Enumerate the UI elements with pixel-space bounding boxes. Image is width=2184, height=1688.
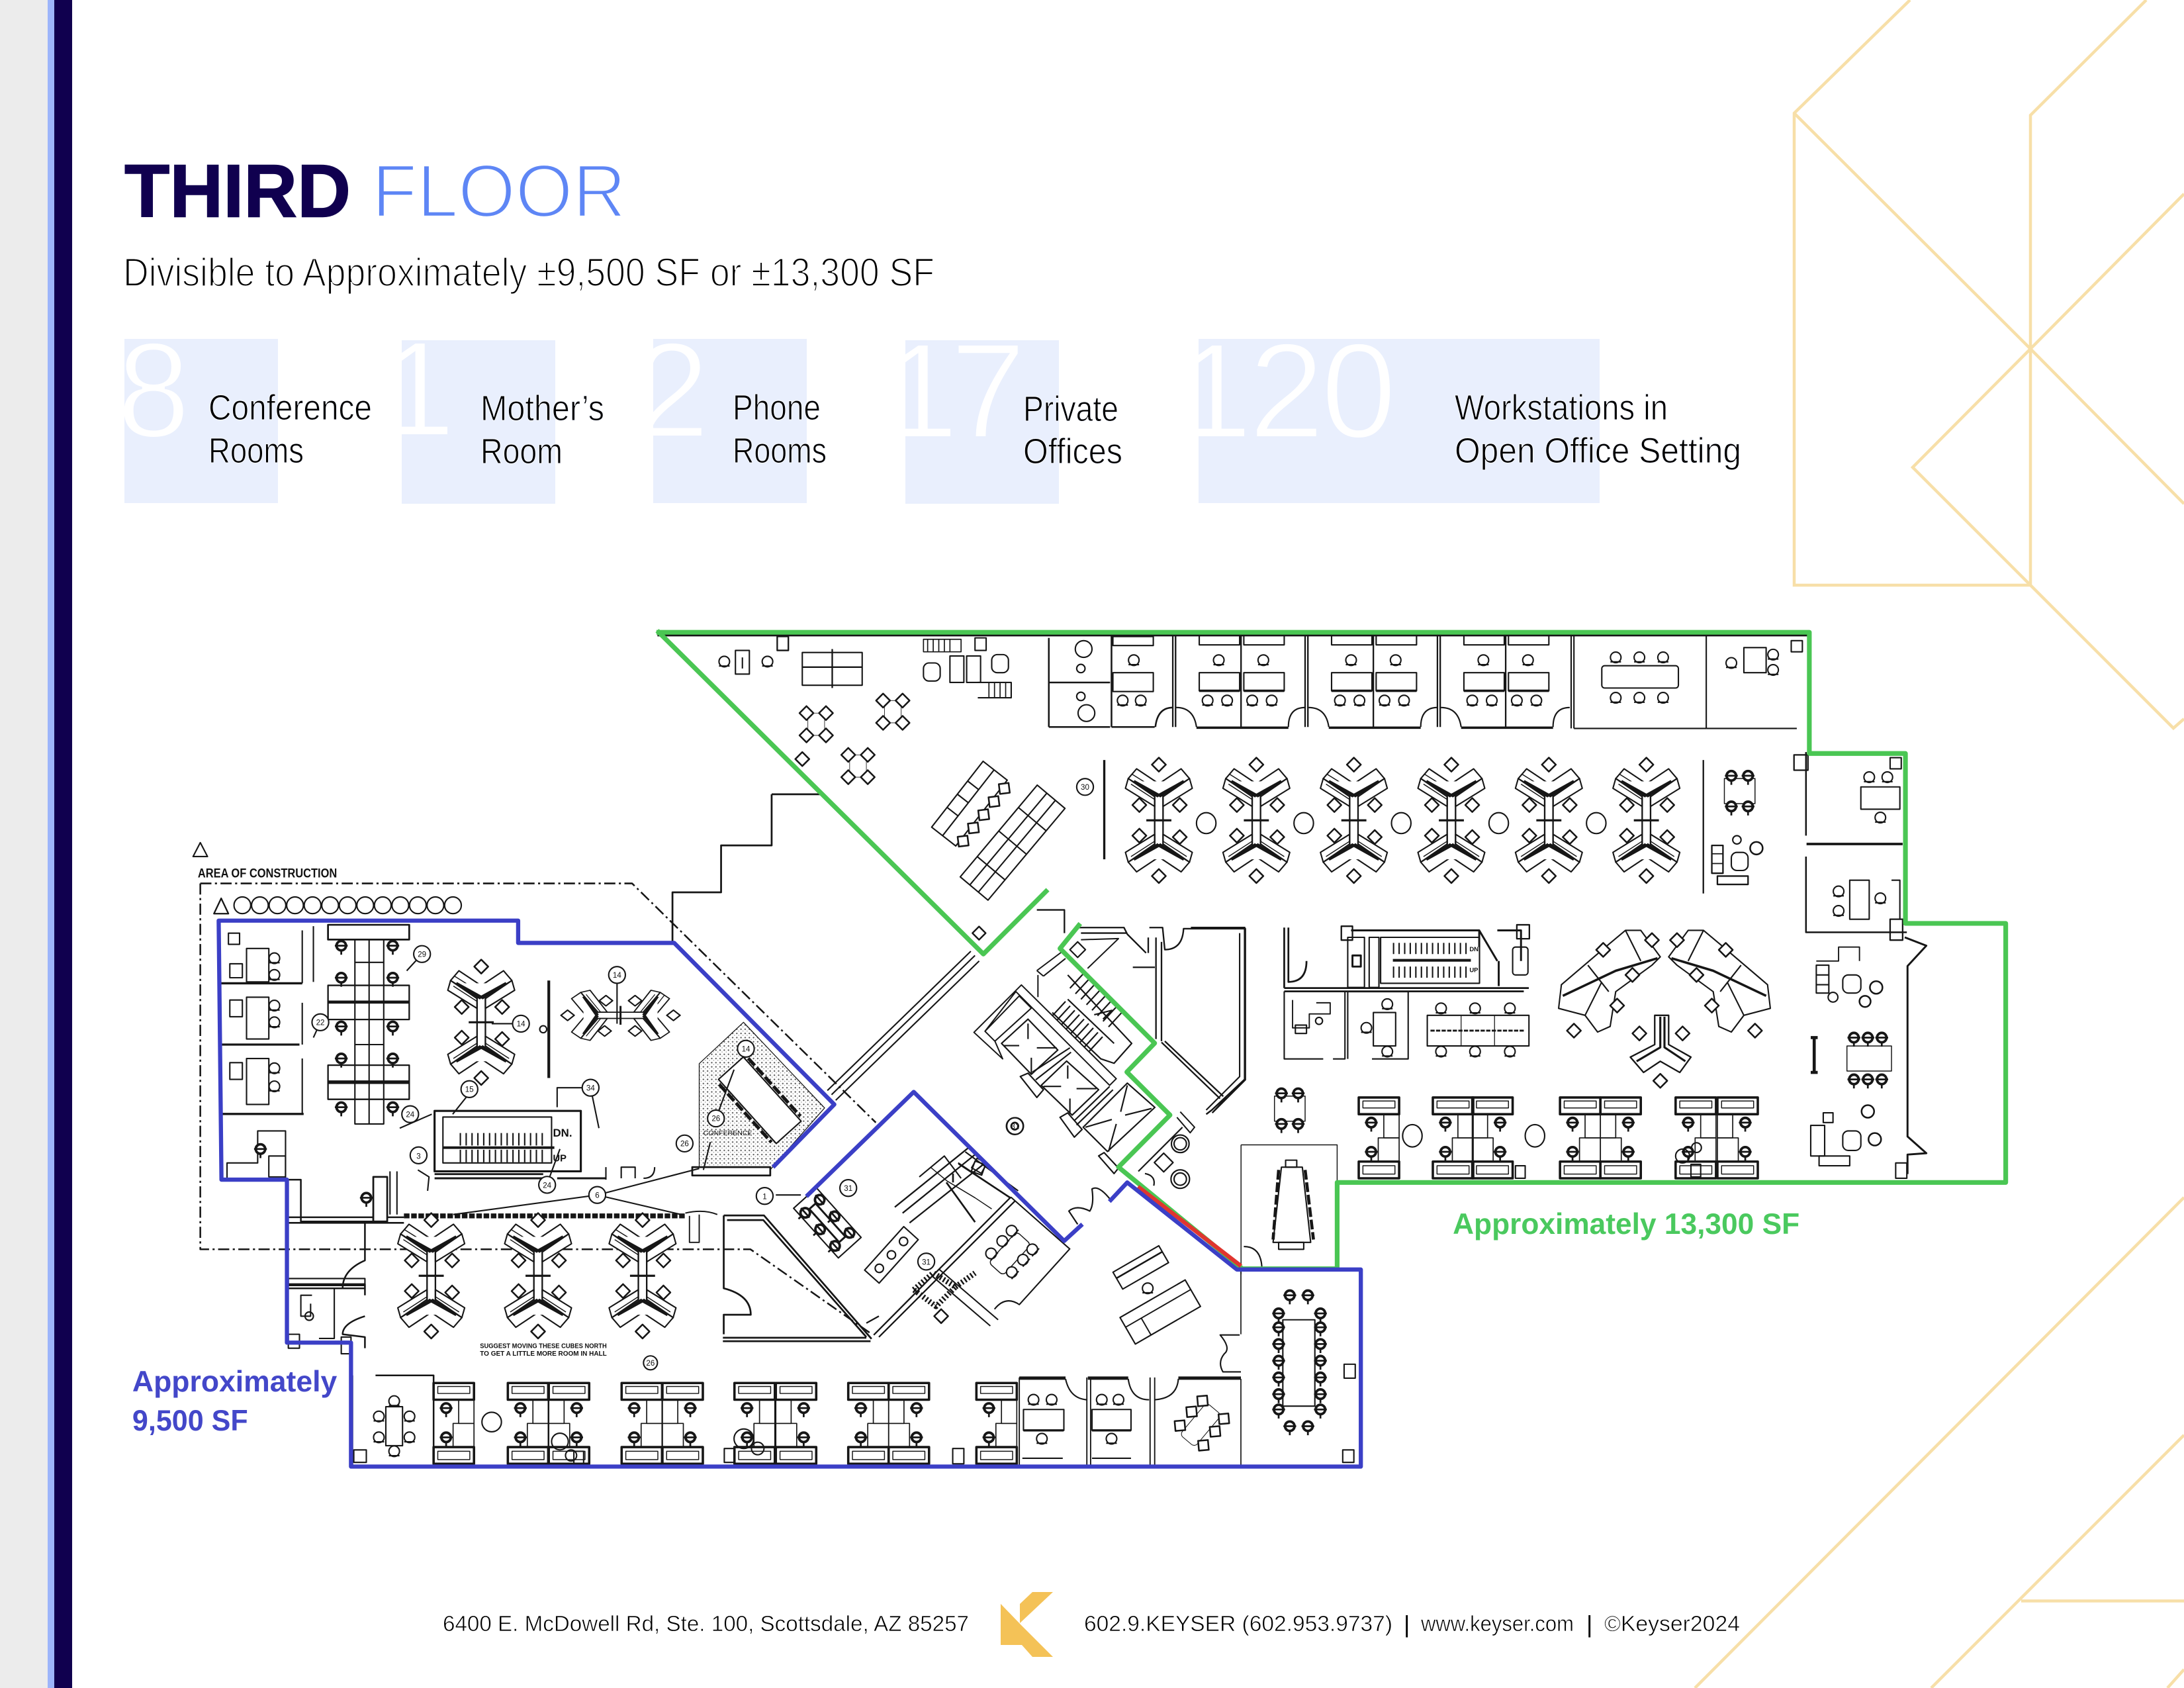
central stair and small offices (1191, 925, 1529, 1114)
stat: 17 private offices: Offices (1023, 432, 1122, 471)
leader lines and callout bubbles: 14 (613, 972, 621, 980)
label: approximately 9,500 SF: 9,500 SF (132, 1405, 248, 1437)
west suite: offices and workstations (221, 925, 685, 1223)
leader lines and callout bubbles: 24 (406, 1111, 415, 1119)
stat: 8 conference rooms (124, 339, 371, 503)
subtitle: Divisible to Approximately ±9,500 SF or ±13,300 SF (123, 250, 934, 295)
stat: 2 phone rooms: Phone (733, 388, 821, 428)
central stair and small offices: UP (1469, 967, 1478, 974)
stat: 17 private offices: 17 (883, 315, 1019, 467)
large boardroom (1220, 1272, 1355, 1467)
leader lines and callout bubbles: 24 (543, 1182, 552, 1190)
leader lines and callout bubbles: 34 (586, 1084, 595, 1092)
elevator and stair core (946, 910, 1246, 1225)
west stairwell: UP (553, 1154, 567, 1164)
footer contact line: www.keyser.com (1420, 1611, 1574, 1636)
title: THIRD (124, 150, 351, 233)
title (124, 150, 626, 233)
stat: 17 private offices: Private (1023, 389, 1118, 429)
9,500 SF boundary: blue outline (218, 921, 1361, 1467)
area of construction note (193, 843, 876, 1335)
south-west workstations (289, 1211, 872, 1467)
stat: 2 phone rooms: 2 (634, 314, 709, 466)
footer contact line: 602.9.KEYSER (602.953.9737) (1084, 1611, 1392, 1636)
label: approximately 13,300 SF: Approximately 13,300 SF (1453, 1208, 1799, 1241)
leader lines and callout bubbles: 14 (742, 1046, 751, 1054)
leader lines and callout bubbles: 22 (316, 1019, 324, 1027)
footer contact line: | (1586, 1611, 1592, 1638)
south-west workstations: TO GET A LITTLE MORE ROOM IN HALL (480, 1350, 607, 1358)
leader lines and callout bubbles: 14 (517, 1021, 525, 1029)
leader lines and callout bubbles: 26 (711, 1115, 720, 1123)
south-east offices (1019, 1246, 1241, 1465)
stat: 120 workstations: 120 (1177, 315, 1393, 467)
conference room north of divide (1241, 1145, 1337, 1274)
leader lines and callout bubbles: 29 (418, 951, 426, 959)
label: approximately 9,500 SF (132, 1366, 338, 1437)
south-west workstations: SUGGEST MOVING THESE CUBES NORTH (480, 1343, 607, 1350)
footer contact line: ©Keyser2024 (1604, 1611, 1740, 1636)
stat: 2 phone rooms: Rooms (733, 431, 827, 471)
east lounges and wall (1811, 937, 1927, 1178)
decorative gold geometric lines: bottom right (1695, 1197, 2184, 1688)
leader lines and callout bubbles: 26 (646, 1360, 655, 1368)
north offices row (657, 635, 1809, 728)
leader lines and callout bubbles: 31 (1011, 1123, 1019, 1131)
stat: 1 mother's room: Mother’s (480, 389, 604, 428)
south workstation row (433, 1383, 1017, 1465)
open workstation clusters (1126, 758, 1762, 894)
stat: 17 private offices (905, 340, 1121, 504)
north lounge (719, 637, 1105, 900)
leader lines and callout bubbles: 30 (1081, 784, 1089, 792)
leader lines and callout bubbles: 6 (595, 1192, 600, 1199)
small conference room with stipple: CONFERENCE (704, 1129, 752, 1137)
label: approximately 9,500 SF: Approximately (132, 1366, 338, 1398)
west stairwell (435, 1111, 655, 1180)
stat: 1 mother's room (402, 340, 604, 504)
stat: 120 workstations: Workstations in (1455, 388, 1668, 428)
central restroom core (791, 1148, 1069, 1337)
leader lines and callout bubbles: 3 (416, 1153, 421, 1161)
central stair and small offices: DN (1469, 946, 1479, 953)
stat: 120 workstations (1199, 339, 1739, 503)
leader lines and callout bubbles: 15 (465, 1086, 474, 1094)
leader lines and callout bubbles: 31 (922, 1258, 931, 1266)
stat: 120 workstations: Open Office Setting (1455, 431, 1741, 471)
icon: keyser logo (1001, 1592, 1053, 1657)
leader lines and callout bubbles: 31 (844, 1185, 852, 1193)
decorative gold geometric lines: top right (1794, 0, 2184, 728)
13,300 SF boundary: green outline (659, 632, 2006, 1269)
east workstation row (1275, 1088, 1758, 1178)
stat: 8 conference rooms: 8 (117, 314, 190, 466)
footer contact line: | (1404, 1611, 1410, 1638)
footer address: 6400 E. McDowell Rd, Ste. 100, Scottsdale, AZ 85257 (443, 1611, 969, 1636)
stat: 2 phone rooms (653, 339, 826, 503)
small conference room with stipple (692, 1022, 825, 1176)
floor plan (132, 632, 2006, 1467)
area of construction note: AREA OF CONSTRUCTION (198, 867, 337, 881)
stat: 1 mother's room: 1 (380, 313, 455, 465)
stat: 8 conference rooms: Rooms (208, 431, 304, 471)
curved workstation cluster (1559, 930, 1770, 1088)
title: FLOOR (372, 150, 626, 233)
stat: 1 mother's room: Room (480, 432, 563, 471)
leader lines and callout bubbles: 1 (762, 1194, 767, 1201)
shared wall: red segment (1138, 1187, 1241, 1266)
perimeter stepped wall (672, 794, 821, 943)
east private offices (1794, 752, 1907, 940)
left margin band (0, 0, 72, 1688)
stat: 8 conference rooms: Conference (208, 388, 372, 428)
leader lines and callout bubbles: 26 (680, 1141, 689, 1149)
leader lines and callout bubbles (312, 778, 1093, 1370)
west stairwell: DN. (553, 1127, 572, 1139)
footer contact line (1084, 1611, 1740, 1638)
diagonal double wall between suites (827, 951, 979, 1100)
